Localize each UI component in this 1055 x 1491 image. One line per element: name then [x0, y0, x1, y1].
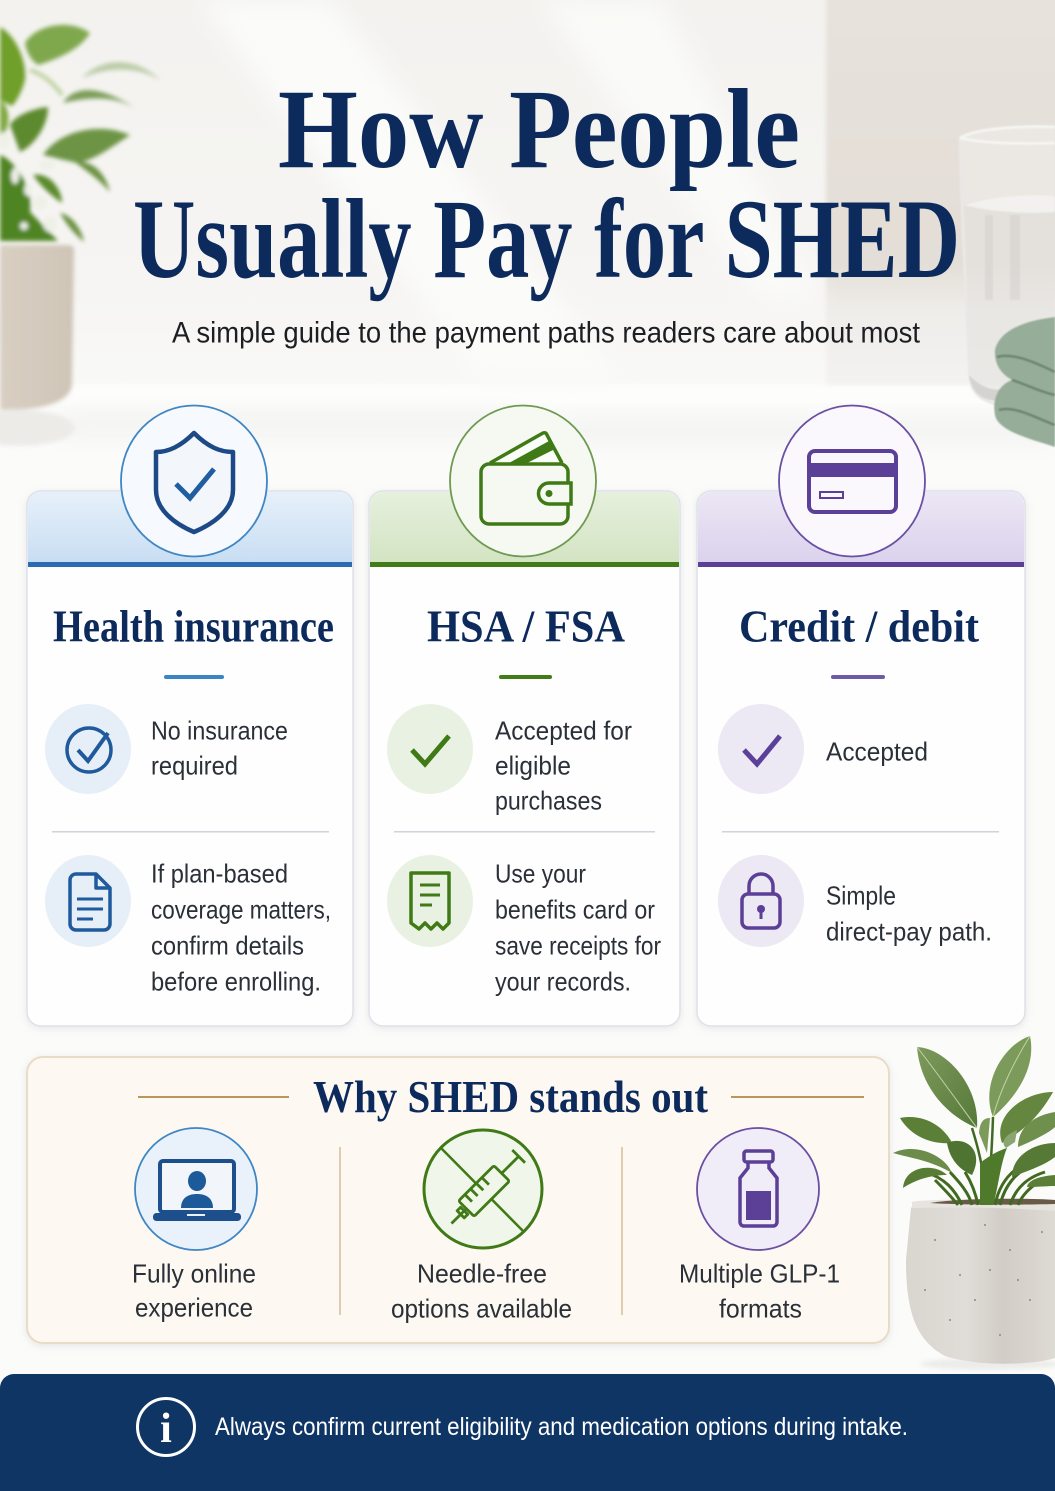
water glass [960, 127, 1055, 405]
icon: shield [121, 406, 267, 556]
left blurred plant [0, 25, 160, 242]
text: direct pay: direct-pay path. [826, 916, 992, 946]
heading: HSA / FSA [427, 602, 625, 652]
footer banner [0, 1374, 1055, 1491]
heading: Credit / debit [739, 602, 979, 652]
text: plan coverage: before enrolling. [151, 966, 321, 996]
panel: why SHED stands out [27, 1057, 889, 1343]
heading: Health insurance [53, 602, 334, 652]
text: benefits card: save receipts for [495, 930, 661, 960]
icon: credit card [779, 406, 925, 556]
accent dash [164, 675, 224, 679]
text: no insurance [151, 716, 288, 780]
text: benefits card: benefits card or [495, 894, 655, 924]
icon: info: i [160, 1406, 172, 1452]
folded towel [994, 317, 1055, 447]
text: benefits card: Use your [495, 858, 586, 888]
panel: hsa fsa [369, 406, 680, 1026]
icon: laptop [135, 1128, 257, 1250]
text: fully online: Fully online [132, 1258, 256, 1288]
icon: document [45, 855, 131, 947]
text: accepted eligible: purchases [495, 786, 602, 816]
icon: info [138, 1398, 194, 1456]
icon: receipt [387, 855, 473, 947]
title: How People [278, 67, 800, 192]
text: fully online [132, 1258, 256, 1322]
text: no insurance: required [151, 750, 238, 780]
text: accepted eligible: Accepted for [495, 716, 632, 746]
text: direct pay: Simple [826, 880, 896, 910]
panel: credit debit [697, 406, 1025, 1026]
text: GLP-1 formats [679, 1258, 840, 1324]
text: benefits card: your records. [495, 966, 631, 996]
text: accepted eligible [495, 716, 632, 816]
text: plan coverage: If plan-based [151, 858, 288, 888]
icon: lock [718, 855, 804, 947]
icon: wallet [450, 406, 596, 556]
text: needle-free: Needle-free [417, 1258, 547, 1288]
text: accepted: Accepted [826, 736, 928, 766]
icon: vial [697, 1128, 819, 1250]
text: plan coverage: coverage matters, [151, 894, 331, 924]
accent dash [499, 675, 552, 679]
text: GLP-1 formats: Multiple GLP-1 [679, 1258, 840, 1288]
icon: check [718, 704, 804, 794]
text: no insurance: No insurance [151, 716, 288, 746]
title [133, 67, 960, 302]
subtitle: A simple guide to the payment paths readers care about most [172, 316, 921, 350]
icon: check badge [45, 704, 131, 794]
icon: no needle [424, 1130, 542, 1248]
accent dash [831, 675, 885, 679]
text: GLP-1 formats: formats [719, 1294, 802, 1324]
text: benefits card [495, 858, 661, 996]
pot [906, 1199, 1055, 1370]
text: plan coverage: confirm details [151, 930, 304, 960]
right potted plant [893, 1036, 1055, 1370]
text: needle-free [391, 1258, 572, 1324]
footer text: Always confirm current eligibility and medication options during intake. [215, 1413, 908, 1441]
icon: check [387, 704, 473, 794]
left blurred pot [0, 245, 74, 410]
heading: Why SHED stands out [313, 1071, 709, 1122]
panel: health insurance [27, 406, 353, 1026]
text: plan coverage [151, 858, 331, 996]
text: fully online: experience [135, 1292, 253, 1322]
text: direct pay [826, 880, 992, 946]
text: accepted eligible: eligible [495, 750, 571, 780]
text: needle-free: options available [391, 1294, 572, 1324]
leaves [893, 1036, 1055, 1205]
